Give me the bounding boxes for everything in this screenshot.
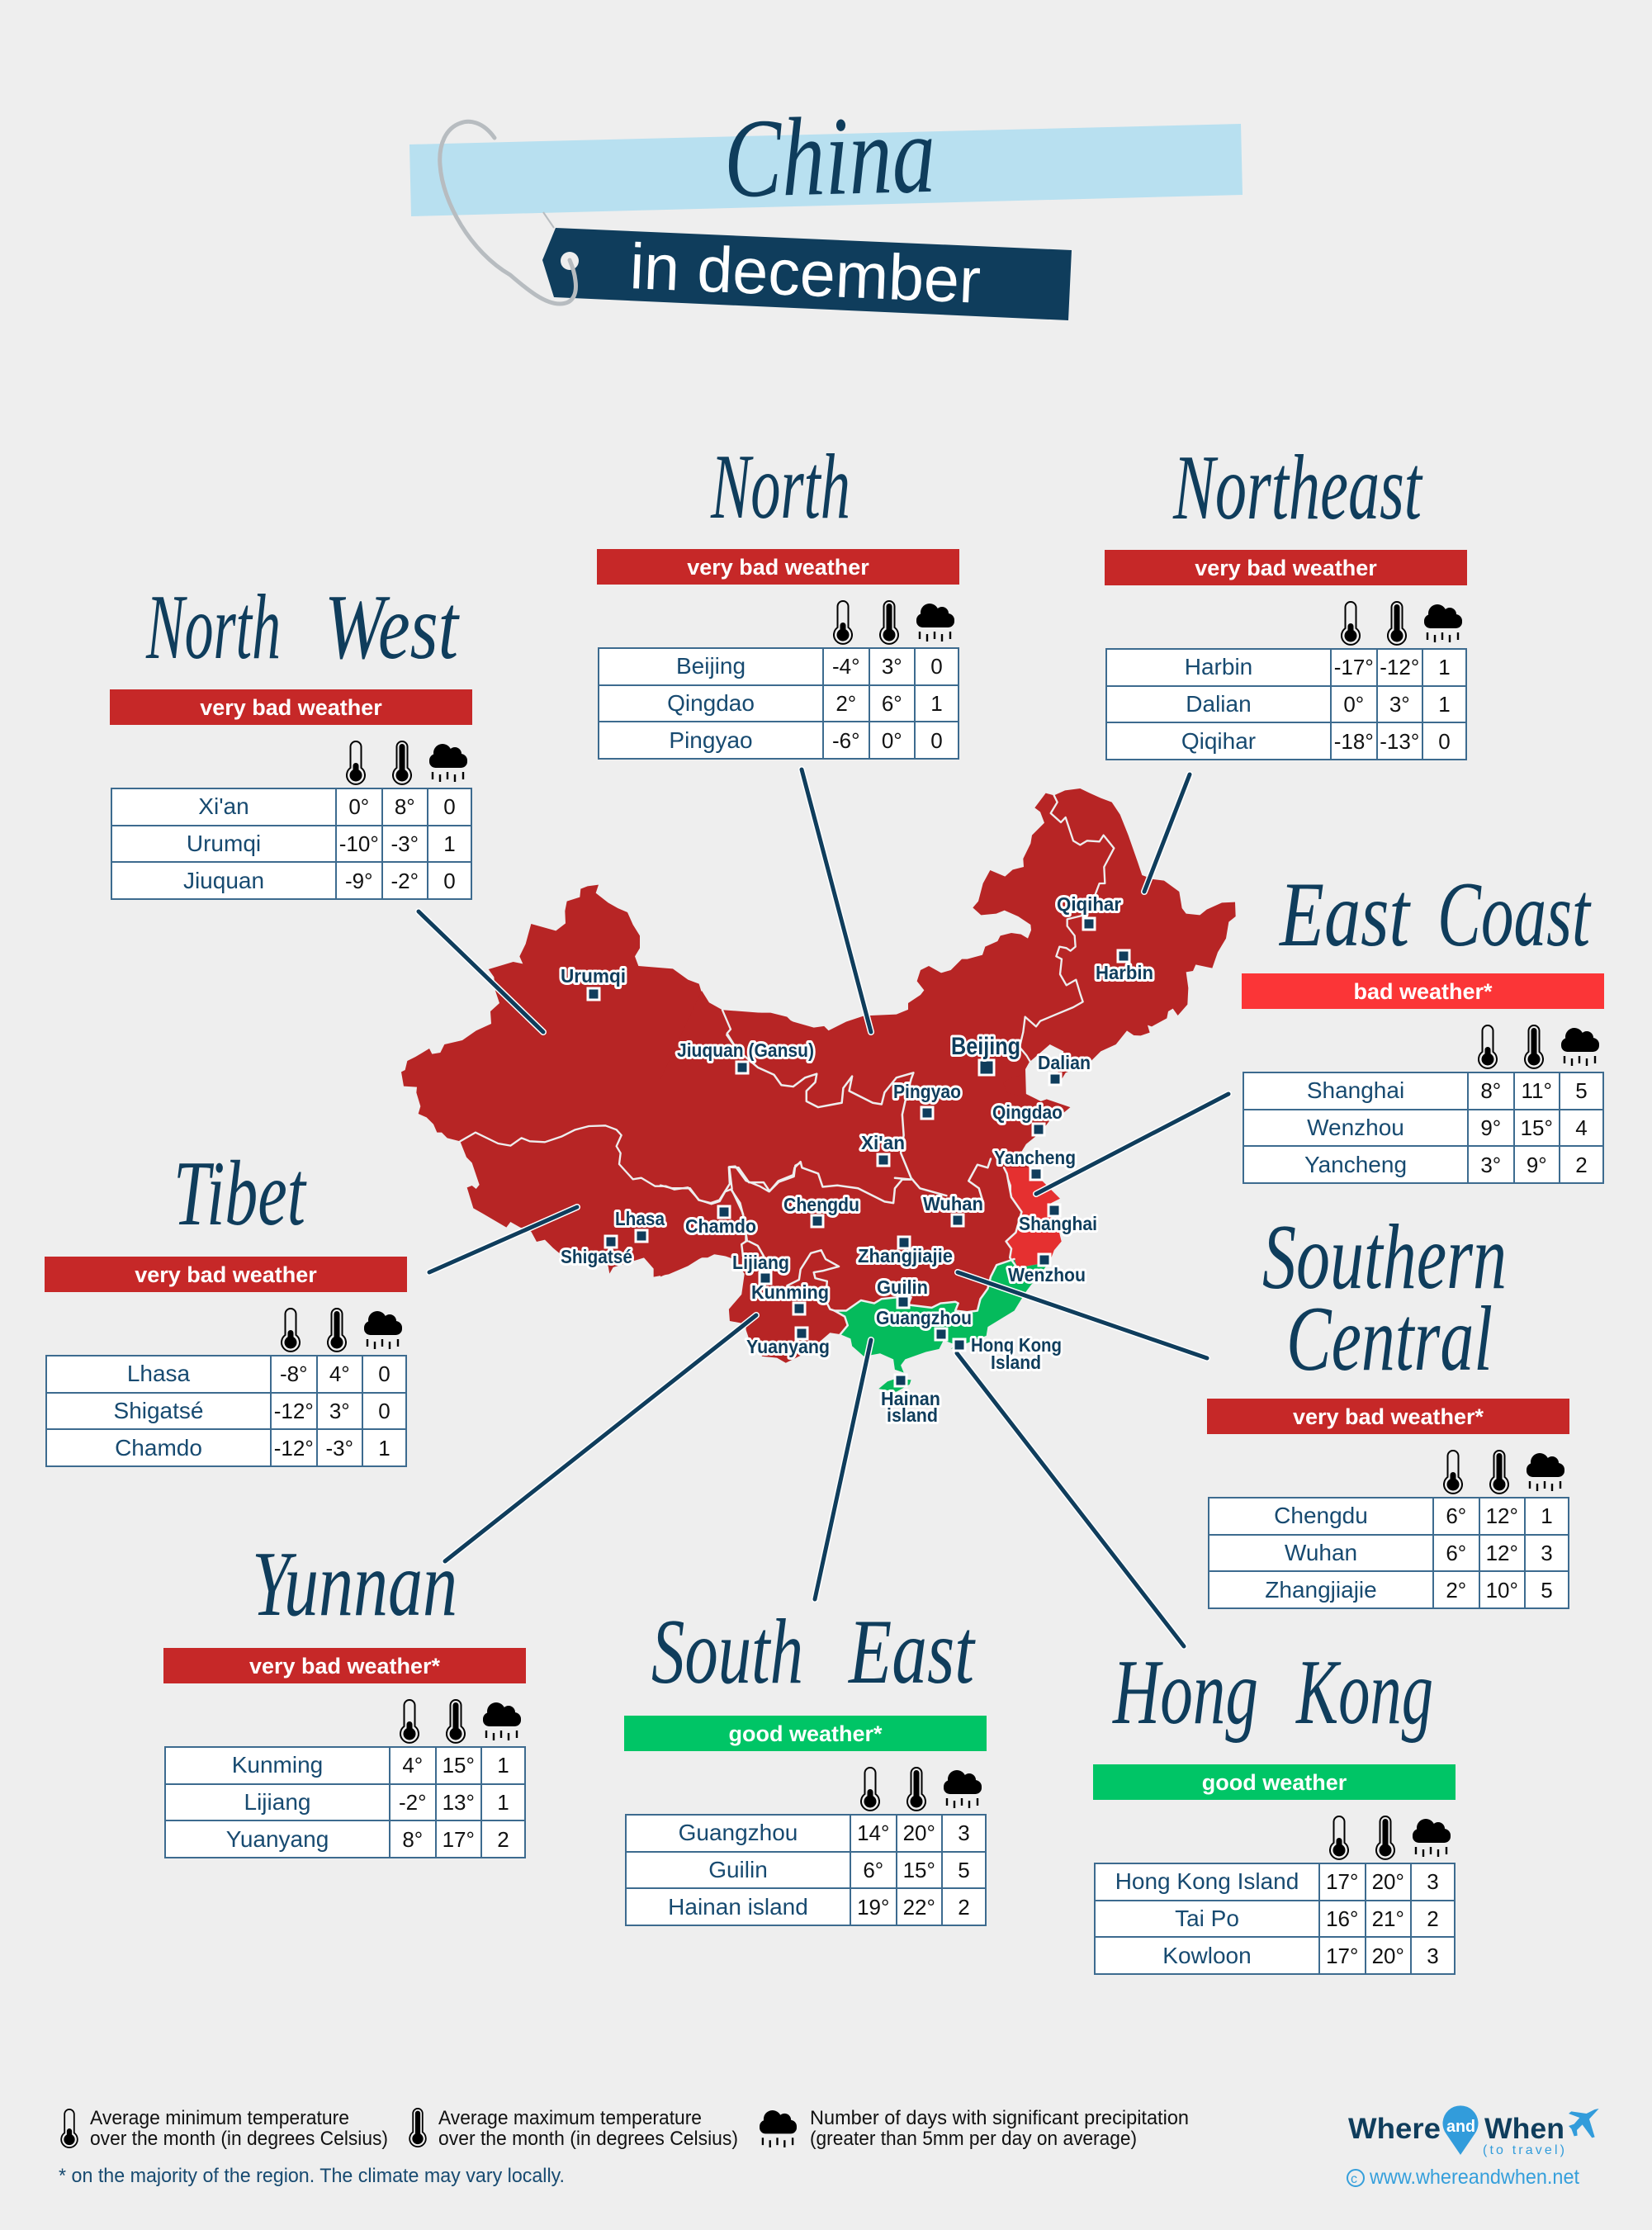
panel: Southern Central: Central bbox=[1286, 1288, 1493, 1390]
legend: precipitation: Number of days with significant precipitation bbox=[810, 2107, 1189, 2129]
column icons bbox=[281, 1308, 402, 1352]
logo: Where and When: Where bbox=[1348, 2113, 1441, 2145]
luggage tag bbox=[542, 228, 1072, 320]
data table: Kunming bbox=[232, 1752, 323, 1778]
column icons bbox=[346, 741, 467, 785]
city labels: Harbin bbox=[1096, 962, 1153, 983]
city labels: Wenzhou bbox=[1008, 1264, 1086, 1285]
data table: Guilin bbox=[708, 1857, 768, 1882]
legend: maximum temperature: Average maximum temperature bbox=[438, 2107, 702, 2129]
data table: 17° bbox=[443, 1827, 475, 1852]
data table: 3 bbox=[1427, 1869, 1439, 1894]
region: south east, good weather bbox=[833, 1259, 1049, 1392]
data table: Tai Po bbox=[1175, 1906, 1239, 1931]
logo: Where and When: (to travel) bbox=[1483, 2143, 1564, 2157]
leader line: Hong Kong bbox=[957, 1353, 1184, 1646]
data table: -10° bbox=[339, 831, 379, 856]
data table: Hong Kong Island bbox=[1115, 1868, 1299, 1894]
city labels: Jiuquan (Gansu) bbox=[677, 1039, 814, 1061]
rating banner: very bad weather* bbox=[249, 1654, 440, 1678]
data table: Zhangjiajie bbox=[1265, 1577, 1377, 1603]
tag hole bbox=[561, 252, 579, 270]
data table: -18° bbox=[1334, 729, 1374, 754]
panel: North West bbox=[110, 576, 472, 900]
data table: Harbin bbox=[1185, 654, 1252, 679]
data table: 8° bbox=[402, 1827, 423, 1852]
data table: Qiqihar bbox=[1181, 728, 1256, 754]
ring thin line bbox=[543, 212, 554, 228]
city labels: Qiqihar bbox=[1057, 893, 1121, 915]
city labels: Pingyao bbox=[893, 1081, 961, 1102]
legend: maximum temperature: over the month (in degrees Celsius) bbox=[438, 2128, 738, 2150]
leader line: Northeast bbox=[1144, 774, 1190, 892]
data table: -6° bbox=[832, 728, 860, 753]
data table: Pingyao bbox=[669, 727, 753, 753]
heading: Northeast: Northeast bbox=[1172, 437, 1423, 539]
data table: 1 bbox=[930, 691, 943, 716]
data table: 20° bbox=[1372, 1944, 1404, 1968]
leader line: Yunnan bbox=[445, 1315, 756, 1561]
data table: -2° bbox=[399, 1790, 426, 1815]
data table: 6° bbox=[882, 691, 902, 716]
data table: 4 bbox=[1575, 1115, 1588, 1140]
legend: precipitation: (greater than 5mm per day on average) bbox=[810, 2128, 1137, 2150]
data table: 11° bbox=[1522, 1078, 1552, 1103]
tag ring bbox=[440, 121, 575, 304]
rating banner bbox=[110, 689, 472, 725]
data table: 1 bbox=[1541, 1503, 1553, 1528]
data table: 5 bbox=[958, 1858, 970, 1882]
data table: 0 bbox=[930, 728, 943, 753]
data table: 3° bbox=[1389, 692, 1410, 717]
data table bbox=[164, 1746, 526, 1858]
logo: Where and When: and bbox=[1446, 2118, 1475, 2136]
city labels: Chengdu bbox=[783, 1194, 859, 1215]
data table: 0 bbox=[378, 1361, 391, 1386]
city labels: Island bbox=[991, 1352, 1041, 1373]
heading: North West: North bbox=[145, 576, 281, 679]
city labels: Xi'an bbox=[861, 1132, 905, 1153]
column icons bbox=[833, 600, 954, 645]
heading: Southern Central bbox=[1262, 1206, 1507, 1390]
rating banner bbox=[45, 1257, 407, 1292]
panel: East Coast bbox=[1242, 864, 1604, 1184]
city labels: Hong Kong bbox=[971, 1334, 1062, 1356]
legend: minimum temperature: over the month (in degrees Celsius) bbox=[90, 2128, 388, 2150]
panel: Northeast bbox=[1105, 437, 1467, 760]
data table bbox=[1094, 1863, 1456, 1975]
data table: Shigatsé bbox=[114, 1398, 203, 1423]
data table: Qingdao bbox=[667, 690, 755, 716]
rating banner: very bad weather bbox=[1195, 556, 1377, 580]
panel: Tibet bbox=[45, 1143, 407, 1467]
column icons bbox=[400, 1699, 521, 1744]
leader line: South East bbox=[815, 1340, 871, 1599]
data table bbox=[1243, 1072, 1604, 1184]
city labels: Lijiang bbox=[732, 1252, 789, 1273]
data table: 19° bbox=[857, 1895, 889, 1920]
data table: 0° bbox=[882, 728, 902, 753]
data table: 14° bbox=[857, 1820, 889, 1845]
data table bbox=[1105, 648, 1467, 760]
title ribbon bbox=[409, 124, 1243, 216]
legend: minimum temperature: Average minimum temperature bbox=[90, 2107, 349, 2129]
heading: East Coast: Coast bbox=[1437, 864, 1592, 966]
data table: 1 bbox=[497, 1753, 509, 1778]
heading: North: North bbox=[710, 436, 850, 538]
city labels bbox=[561, 893, 1153, 1426]
panel: North bbox=[597, 436, 959, 760]
data table: 3° bbox=[882, 654, 902, 679]
legend: minimum temperature bbox=[61, 2107, 388, 2150]
leader line: North bbox=[802, 769, 871, 1032]
column icons bbox=[860, 1767, 982, 1811]
column icons bbox=[1329, 1816, 1451, 1860]
city labels: Chamdo bbox=[685, 1215, 756, 1237]
data table: 0 bbox=[1438, 729, 1451, 754]
legend: maximum temperature bbox=[409, 2107, 738, 2150]
data table: -4° bbox=[832, 654, 860, 679]
column icons bbox=[1341, 601, 1462, 646]
data table: 16° bbox=[1326, 1906, 1358, 1931]
city markers bbox=[588, 918, 1129, 1386]
rating banner bbox=[163, 1648, 526, 1683]
data table: -12° bbox=[1380, 655, 1419, 679]
city labels: Beijing bbox=[951, 1033, 1020, 1060]
city labels: Hainan bbox=[881, 1388, 940, 1409]
data table bbox=[598, 647, 959, 760]
city labels: Shigatsé bbox=[561, 1246, 632, 1267]
data table: -8° bbox=[280, 1361, 307, 1386]
data table: -17° bbox=[1334, 655, 1374, 679]
data table: 3° bbox=[329, 1399, 350, 1423]
data table: 22° bbox=[903, 1895, 935, 1920]
city labels: Zhangjiajie bbox=[858, 1245, 953, 1267]
heading: Hong Kong: Kong bbox=[1295, 1641, 1433, 1744]
data table: -9° bbox=[345, 869, 373, 893]
rating banner bbox=[624, 1716, 987, 1751]
data table: 15° bbox=[443, 1753, 475, 1778]
heading: South East: South bbox=[651, 1601, 803, 1703]
data table: 17° bbox=[1326, 1944, 1358, 1968]
region: east coast, bad weather bbox=[1004, 1167, 1062, 1268]
data table: 2 bbox=[958, 1895, 970, 1920]
panel: Yunnan bbox=[163, 1533, 526, 1858]
data table: 8° bbox=[1480, 1078, 1501, 1103]
panel: Southern Central bbox=[1207, 1206, 1569, 1609]
data table: Shanghai bbox=[1307, 1077, 1404, 1103]
rating banner bbox=[1093, 1764, 1456, 1800]
data table: 13° bbox=[443, 1790, 475, 1815]
data table: 0 bbox=[378, 1399, 391, 1423]
data table: 2° bbox=[1446, 1578, 1466, 1603]
data table: 1 bbox=[1438, 655, 1451, 679]
column icons bbox=[1478, 1025, 1599, 1069]
city labels: Urumqi bbox=[561, 965, 626, 987]
data table: 6° bbox=[1446, 1541, 1466, 1565]
rating banner bbox=[1207, 1399, 1569, 1434]
logo: Where and When: When bbox=[1484, 2113, 1564, 2145]
data table: Chamdo bbox=[115, 1435, 202, 1461]
data table: 2 bbox=[1427, 1906, 1439, 1931]
data table: Beijing bbox=[676, 653, 746, 679]
data table: 0° bbox=[1343, 692, 1364, 717]
data table: 2 bbox=[1575, 1153, 1588, 1177]
data table: -3° bbox=[325, 1436, 353, 1461]
panel: Hong Kong bbox=[1093, 1641, 1456, 1975]
rating banner: good weather bbox=[1202, 1770, 1347, 1795]
data table: Xi'an bbox=[198, 793, 249, 819]
city labels: Yancheng bbox=[994, 1147, 1076, 1168]
data table: 20° bbox=[1372, 1869, 1404, 1894]
data table: Yuanyang bbox=[226, 1826, 329, 1852]
subheading: in december: in december bbox=[628, 230, 982, 317]
data table: Chengdu bbox=[1274, 1503, 1368, 1528]
data table bbox=[45, 1355, 407, 1467]
data table: 12° bbox=[1486, 1541, 1518, 1565]
data table: 3 bbox=[1427, 1944, 1439, 1968]
legend and footer bbox=[59, 2105, 1598, 2189]
data table: 4° bbox=[402, 1753, 423, 1778]
data table: 6° bbox=[1446, 1503, 1466, 1528]
data table: Guangzhou bbox=[679, 1820, 798, 1845]
rating banner bbox=[1242, 973, 1604, 1009]
data table: 15° bbox=[1521, 1115, 1553, 1140]
website credit: c bbox=[1351, 2172, 1357, 2186]
data table: Yancheng bbox=[1304, 1152, 1407, 1177]
column icons bbox=[1443, 1450, 1564, 1494]
data table: Dalian bbox=[1186, 691, 1252, 717]
leader line: Southern Central bbox=[958, 1272, 1207, 1358]
data table: 3 bbox=[958, 1820, 970, 1845]
legend: precipitation bbox=[760, 2107, 1189, 2150]
data table: Urumqi bbox=[187, 831, 261, 856]
data table: 1 bbox=[378, 1436, 391, 1461]
heading: Southern Central: Southern bbox=[1262, 1206, 1507, 1309]
data table: 3° bbox=[1480, 1153, 1501, 1177]
data table: 2 bbox=[497, 1827, 509, 1852]
data table: 5 bbox=[1575, 1078, 1588, 1103]
heading: South East: East bbox=[847, 1601, 976, 1703]
rating banner: very bad weather bbox=[687, 555, 869, 580]
data table: 1 bbox=[1438, 692, 1451, 717]
rating banner: very bad weather bbox=[135, 1262, 317, 1287]
panel: South East bbox=[624, 1601, 987, 1926]
heading: North West: West bbox=[324, 576, 460, 679]
city labels: Dalian bbox=[1038, 1052, 1091, 1073]
data table: 0° bbox=[348, 794, 369, 819]
city labels: Kunming bbox=[751, 1281, 829, 1303]
data table: 5 bbox=[1541, 1578, 1553, 1603]
city labels: Guilin bbox=[877, 1276, 928, 1298]
heading: East Coast: East bbox=[1278, 864, 1411, 966]
data table: Wuhan bbox=[1285, 1540, 1357, 1565]
city labels: island bbox=[887, 1404, 938, 1426]
data table: Wenzhou bbox=[1307, 1115, 1404, 1140]
data table bbox=[1208, 1497, 1569, 1609]
data table: -2° bbox=[391, 869, 419, 893]
rating banner bbox=[1105, 550, 1467, 585]
data table: -3° bbox=[391, 831, 419, 856]
title: China in december tag bbox=[409, 92, 1243, 320]
city labels: Guangzhou bbox=[876, 1307, 972, 1328]
city labels: Wuhan bbox=[923, 1193, 983, 1214]
rating banner bbox=[597, 549, 959, 585]
city labels: Shanghai bbox=[1019, 1213, 1097, 1234]
footnote: * on the majority of the region. The climate may vary locally. bbox=[59, 2165, 565, 2187]
data table: 0 bbox=[443, 794, 456, 819]
data table: 4° bbox=[329, 1361, 350, 1386]
data table: Kowloon bbox=[1162, 1943, 1252, 1968]
data table: -13° bbox=[1380, 729, 1419, 754]
heading: North West bbox=[145, 576, 460, 679]
website credit: www.whereandwhen.net bbox=[1369, 2166, 1579, 2189]
leader line: Tibet bbox=[429, 1207, 577, 1272]
heading: South East bbox=[651, 1601, 976, 1703]
rating banner: very bad weather* bbox=[1293, 1404, 1484, 1429]
data table: 3 bbox=[1541, 1541, 1553, 1565]
heading: Hong Kong: Hong bbox=[1112, 1641, 1258, 1744]
leader line: East Coast bbox=[1036, 1094, 1228, 1194]
rating banner: good weather* bbox=[728, 1721, 883, 1746]
region borders bbox=[460, 795, 1114, 1334]
leader line: North West bbox=[419, 911, 543, 1032]
data table: 0 bbox=[443, 869, 456, 893]
data table: 10° bbox=[1486, 1578, 1518, 1603]
city labels: Lhasa bbox=[615, 1208, 665, 1229]
data table: 8° bbox=[395, 794, 415, 819]
data table: 9° bbox=[1480, 1115, 1501, 1140]
heading: China: China bbox=[722, 92, 937, 221]
data table: 6° bbox=[863, 1858, 883, 1882]
rating banner: very bad weather bbox=[200, 695, 382, 720]
heading: East Coast bbox=[1278, 864, 1592, 966]
data table: -12° bbox=[274, 1436, 314, 1461]
data table: Lhasa bbox=[127, 1361, 190, 1386]
city labels: Qingdao bbox=[992, 1101, 1063, 1123]
data table: 17° bbox=[1326, 1869, 1358, 1894]
data table: 15° bbox=[903, 1858, 935, 1882]
city labels: Yuanyang bbox=[746, 1336, 830, 1357]
heading: Tibet: Tibet bbox=[173, 1143, 307, 1245]
data table: 21° bbox=[1372, 1906, 1404, 1931]
data table: 20° bbox=[903, 1820, 935, 1845]
data table: 1 bbox=[443, 831, 456, 856]
data table: -12° bbox=[274, 1399, 314, 1423]
data table: Lijiang bbox=[244, 1789, 310, 1815]
data table: 9° bbox=[1527, 1153, 1547, 1177]
rating banner: bad weather* bbox=[1353, 979, 1493, 1004]
logo: Where and When bbox=[1348, 2105, 1599, 2157]
region shapes: very bad weather bbox=[401, 788, 1236, 1363]
data table bbox=[111, 788, 472, 900]
data table bbox=[625, 1814, 987, 1926]
data table: Jiuquan bbox=[183, 868, 264, 893]
data table: 12° bbox=[1486, 1503, 1518, 1528]
heading: Yunnan: Yunnan bbox=[252, 1533, 457, 1636]
data table: 1 bbox=[497, 1790, 509, 1815]
data table: Hainan island bbox=[668, 1894, 808, 1920]
data table: 0 bbox=[930, 654, 943, 679]
data table: 2° bbox=[835, 691, 856, 716]
heading: Hong Kong bbox=[1112, 1641, 1433, 1744]
